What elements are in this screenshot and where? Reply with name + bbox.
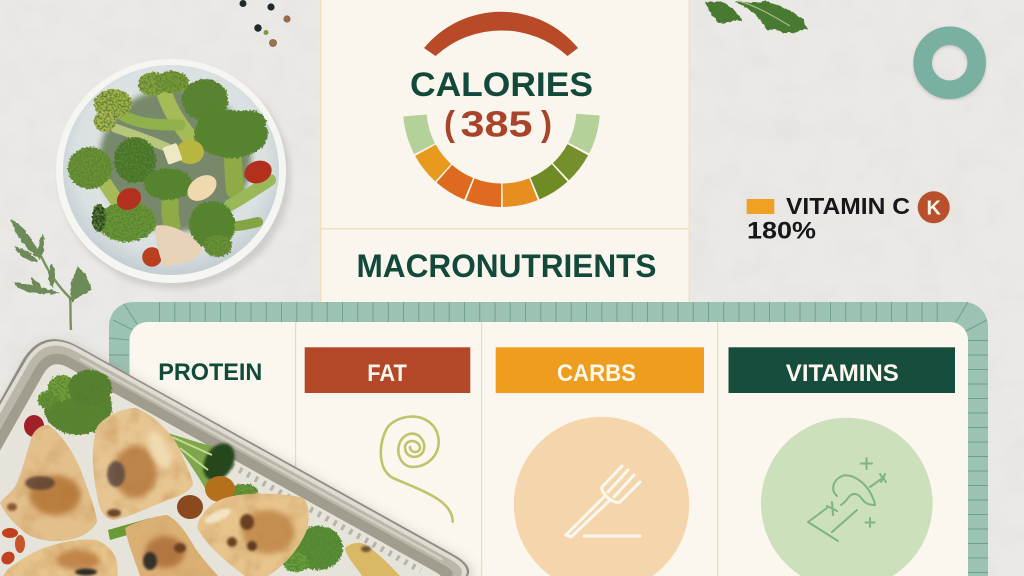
bowl of broccoli bbox=[56, 59, 291, 289]
vitamin C percentage: 180% bbox=[747, 218, 816, 244]
carbs header: CARBS bbox=[557, 360, 636, 387]
chicken thigh left bbox=[0, 425, 97, 541]
peppercorns bbox=[240, 0, 291, 47]
calorie gauge top arc bbox=[424, 12, 578, 56]
broccoli on pan bbox=[38, 370, 343, 572]
sheet pan with roasted chicken bbox=[0, 339, 469, 576]
chicken pieces bbox=[155, 143, 221, 266]
icon: vitamins line art bbox=[808, 458, 886, 541]
icon: fat spiral bbox=[381, 417, 453, 522]
K badge: K bbox=[926, 198, 941, 220]
herb top right bbox=[705, 1, 807, 33]
chicken thigh lower left bbox=[3, 539, 118, 576]
calorie gauge segments bbox=[379, 0, 624, 231]
panel: calories bbox=[320, 0, 690, 302]
carbs circle bbox=[514, 417, 689, 576]
panel: macronutrient table frame bbox=[109, 302, 988, 576]
tomatoes bbox=[113, 157, 275, 267]
calories value bbox=[444, 104, 552, 144]
pan bbox=[0, 339, 469, 576]
vitamin C legend bbox=[747, 191, 950, 244]
calories value: ) bbox=[541, 104, 552, 144]
calories value: ( bbox=[444, 104, 455, 144]
chicken thigh right bbox=[197, 494, 309, 576]
fat header: FAT bbox=[367, 360, 407, 387]
fat header bbox=[305, 347, 470, 393]
calories value: 385 bbox=[460, 104, 532, 144]
vitamins header bbox=[728, 347, 955, 393]
carbs header bbox=[496, 347, 704, 393]
legend swatch bbox=[747, 199, 774, 214]
icon: fork bbox=[566, 466, 640, 537]
K badge bbox=[918, 191, 950, 223]
bowl bbox=[56, 59, 291, 289]
broccoli florets bbox=[68, 71, 268, 257]
chicken thigh bottom bbox=[125, 515, 218, 576]
yellow floret bbox=[176, 140, 204, 164]
vitamin C label: VITAMIN C bbox=[786, 193, 910, 219]
vitamins circle bbox=[761, 418, 933, 576]
table card bbox=[130, 322, 968, 576]
tomatoes on pan bbox=[0, 415, 235, 567]
column: fat bbox=[305, 347, 470, 522]
chicken thigh centre bbox=[93, 408, 193, 520]
herb sprig left bbox=[11, 219, 91, 330]
calories title: CALORIES bbox=[410, 66, 593, 104]
broccoli stalks bbox=[95, 95, 270, 226]
column: carbs bbox=[496, 347, 704, 576]
food shadow mass bbox=[99, 88, 251, 232]
macronutrients heading: MACRONUTRIENTS bbox=[356, 248, 656, 284]
column: protein heading: PROTEIN bbox=[158, 359, 262, 386]
column: vitamins bbox=[728, 347, 955, 576]
vitamins header: VITAMINS bbox=[786, 360, 899, 387]
chicken piece far right bbox=[345, 543, 400, 576]
teal ring decoration bbox=[923, 36, 977, 90]
